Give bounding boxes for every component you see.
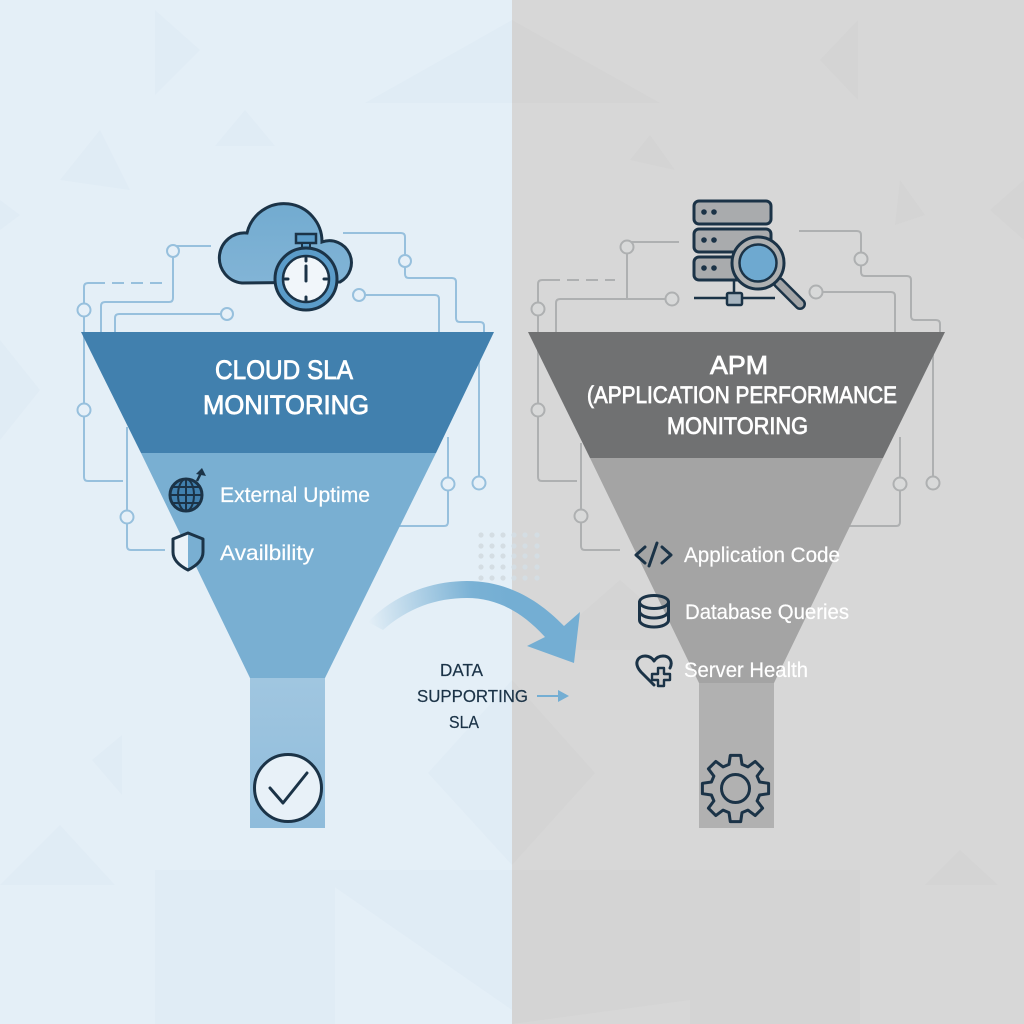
icon: gear [702,755,769,822]
label: data supporting SLA: SUPPORTING [417,686,528,706]
icon: database [640,596,668,627]
funnel lower cone [141,453,436,678]
icon: shield [173,533,203,570]
funnel stem [250,678,325,828]
title: APM [587,350,897,440]
icon: check circle [254,754,322,822]
right funnel [528,332,945,828]
funnel top band [528,332,945,458]
background: left panel [0,0,512,1024]
icon: cloud with stopwatch [219,204,351,310]
icon: server with magnifier [694,201,800,305]
funnel lower cone [590,458,883,683]
title: APM: (APPLICATION PERFORMANCE [587,382,897,409]
title: Cloud SLA Monitoring: MONITORING [203,390,369,420]
label: data supporting SLA [417,660,528,732]
title: Cloud SLA Monitoring: CLOUD SLA [215,355,353,385]
circuit lines: left [78,233,486,550]
label: Availbility: Availbility [220,542,315,565]
icon: code brackets [636,543,671,566]
background: right panel [512,0,1024,1024]
arrow: small pointer [537,690,569,702]
dot grid decoration [478,532,540,581]
label: External Uptime: External Uptime [220,484,370,507]
label: Application Code: Application Code [684,544,840,567]
title: APM: MONITORING [667,413,808,440]
title: APM: APM [710,350,768,380]
icon: globe with up arrow [170,468,206,511]
label: data supporting SLA: SLA [449,712,479,732]
label: Database Queries: Database Queries [685,601,849,624]
funnel top band [81,332,494,453]
label: data supporting SLA: DATA [440,660,483,680]
funnel stem [699,683,774,828]
circuit lines: right [532,231,940,550]
title: Cloud SLA Monitoring [203,355,369,420]
left funnel [81,332,494,828]
icon: heart with plus [637,656,671,686]
arrow: curved data flow [368,581,580,663]
label: Server Health: Server Health [684,659,808,682]
